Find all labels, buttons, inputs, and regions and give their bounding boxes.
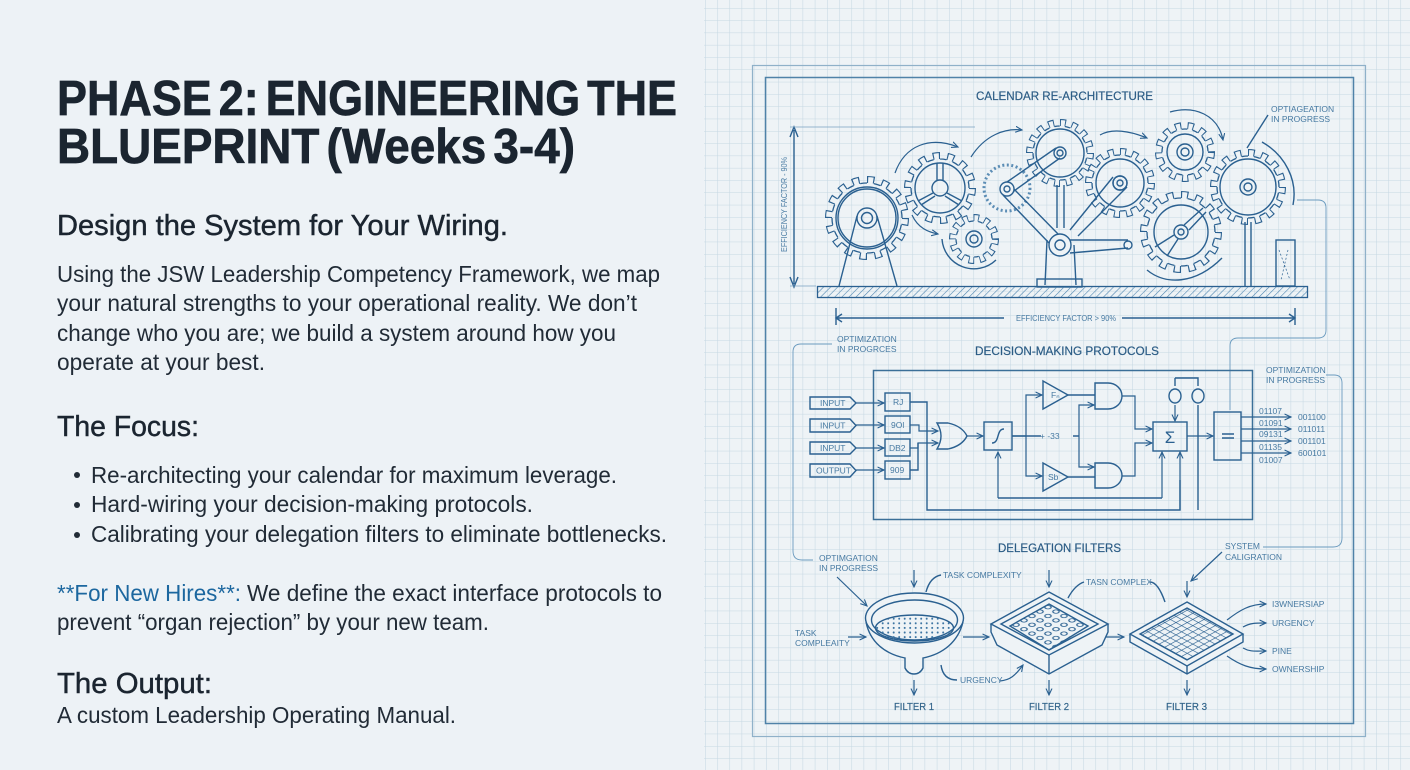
label: optimization: OPTIAGEATION	[1271, 104, 1334, 114]
gears	[828, 122, 1282, 270]
binary values: 600101	[1298, 448, 1327, 458]
binary values: 01107	[1259, 406, 1282, 416]
intro paragraph: change who you are; we build a system around how you	[57, 320, 616, 346]
binary values: 09131	[1259, 429, 1283, 439]
annotations: CALIGRATION	[1225, 552, 1282, 562]
label: optimization	[1271, 104, 1334, 124]
gear 6	[1158, 126, 1212, 178]
label: optimization right: OPTIMIZATION	[1266, 365, 1326, 375]
filter labels: FILTER 2	[1029, 702, 1069, 713]
input tag labels: INPUT	[820, 420, 846, 430]
connector wires	[793, 200, 1342, 560]
new hires note: prevent “organ rejection” by your new team.	[57, 609, 489, 635]
gear 1	[828, 180, 906, 256]
gear 2	[908, 156, 972, 220]
base platform	[818, 286, 1308, 298]
heading: the output: The Output:	[57, 668, 212, 700]
logic gates and blocks	[937, 381, 1241, 491]
focus bullet list: Calibrating your delegation filters to eliminate bottlenecks.	[91, 521, 667, 547]
heading: DELEGATION FILTERS	[998, 541, 1121, 555]
intro paragraph: operate at your best.	[57, 349, 265, 375]
binary values: 01091	[1259, 418, 1283, 428]
filter labels	[894, 702, 1207, 713]
gear 7	[1144, 194, 1218, 270]
title: BLUEPRINT (Weeks 3-4)	[57, 120, 575, 174]
blueprint frames	[752, 66, 1366, 736]
register boxes: DB2	[889, 443, 906, 453]
register boxes: 909	[890, 465, 904, 475]
input tag labels: OUTPUT	[816, 466, 851, 476]
binary values	[1259, 406, 1327, 465]
heading: CALENDAR RE-ARCHITECTURE	[976, 89, 1153, 103]
filter 2: square sieve	[991, 592, 1108, 674]
circuit box	[874, 370, 1252, 520]
binary values: 011011	[1298, 424, 1325, 434]
gear 4	[1030, 122, 1090, 184]
register boxes: 9Ol	[891, 420, 904, 430]
annotations: OWNERSHIP	[1272, 664, 1325, 674]
section: delegation filters	[795, 541, 1325, 713]
horizontal dimension: EFFICIENCY FACTOR > 90%	[1016, 313, 1116, 323]
block symbols: Fₙ	[1051, 390, 1060, 400]
heading: the focus: The Focus:	[57, 411, 199, 443]
label: optimization left	[837, 334, 897, 354]
input tag labels	[816, 398, 851, 476]
motion arrows	[895, 110, 1294, 280]
vertical dimension	[779, 127, 975, 287]
intro paragraph	[57, 261, 660, 375]
filter labels: FILTER 1	[894, 702, 934, 713]
block symbols	[1040, 390, 1175, 482]
horizontal dimension	[836, 308, 1295, 325]
gear 3	[942, 218, 996, 269]
signal lines	[856, 378, 1213, 510]
gear 5	[1088, 152, 1152, 214]
label: optimization: IN PROGRESS	[1271, 114, 1330, 124]
binary values: 01135	[1259, 442, 1282, 452]
annotations: TASN COMPLEX	[1086, 577, 1152, 587]
panel: text column	[57, 72, 677, 728]
focus bullet list: Hard-wiring your decision-making protocols.	[91, 491, 533, 517]
grid paper background	[704, 0, 1410, 770]
input tag labels: INPUT	[820, 398, 846, 408]
block symbols: Sb	[1048, 472, 1059, 482]
output description: A custom Leadership Operating Manual.	[57, 702, 456, 728]
panel: blueprint	[704, 0, 1410, 770]
label: optimization right: IN PROGRESS	[1266, 375, 1325, 385]
filter 3: fine mesh	[1130, 602, 1243, 674]
input tag labels: INPUT	[820, 443, 846, 453]
vertical dimension: EFFICIENCY FACTOR - 90%	[779, 157, 789, 252]
annotations: IN PROGRESS	[819, 563, 878, 573]
binary values: 01007	[1259, 455, 1283, 465]
gear 8	[1214, 152, 1282, 222]
title: PHASE 2: ENGINEERING THE	[57, 72, 677, 126]
ghost gear	[984, 165, 1030, 211]
title	[57, 72, 677, 174]
annotations	[795, 541, 1325, 685]
output arrows	[1241, 417, 1291, 453]
annotations: OPTIMGATION	[819, 553, 878, 563]
intro paragraph: your natural strengths to your operational reality. We don’t	[57, 290, 638, 316]
block symbols: + -33	[1040, 431, 1060, 441]
new hires note	[57, 580, 662, 635]
annotations: SYSTEM	[1225, 541, 1260, 551]
annotations: PINE	[1272, 646, 1292, 656]
intro paragraph: Using the JSW Leadership Competency Framework, we map	[57, 261, 660, 287]
subheading: design the system: Design the System for Your Wiring.	[57, 210, 508, 242]
label: optimization left: IN PROGRCES	[837, 344, 897, 354]
new hires note: **For New Hires**:	[57, 580, 241, 606]
register boxes: RJ	[893, 397, 903, 407]
input tags	[810, 397, 856, 477]
block symbols: Σ	[1165, 428, 1175, 447]
annotations: I3WNERSIAP	[1272, 599, 1325, 609]
binary values: 001101	[1298, 436, 1326, 446]
annotations: URGENCY	[1272, 618, 1315, 628]
filter 1: funnel	[866, 593, 964, 674]
annotations: TASK	[795, 628, 817, 638]
binary values: 001100	[1298, 412, 1326, 422]
annotations: TASK COMPLEXITY	[943, 570, 1022, 580]
annotations: URGENCY	[960, 675, 1003, 685]
register boxes	[885, 393, 910, 479]
section: decision-making protocols	[810, 334, 1327, 520]
new hires note: We define the exact interface protocols to	[247, 580, 662, 606]
label: optimization left: OPTIMIZATION	[837, 334, 897, 344]
annotations: COMPLEAITY	[795, 638, 850, 648]
heading: DECISION-MAKING PROTOCOLS	[975, 344, 1159, 358]
support arms and column	[839, 148, 1295, 287]
flow arrows	[837, 552, 1266, 695]
filter labels: FILTER 3	[1166, 702, 1207, 713]
focus bullet list: Re-architecting your calendar for maximum leverage.	[91, 462, 617, 488]
section: calendar re-architecture	[779, 89, 1334, 325]
label: optimization right	[1266, 365, 1326, 385]
focus bullet list	[74, 462, 667, 547]
